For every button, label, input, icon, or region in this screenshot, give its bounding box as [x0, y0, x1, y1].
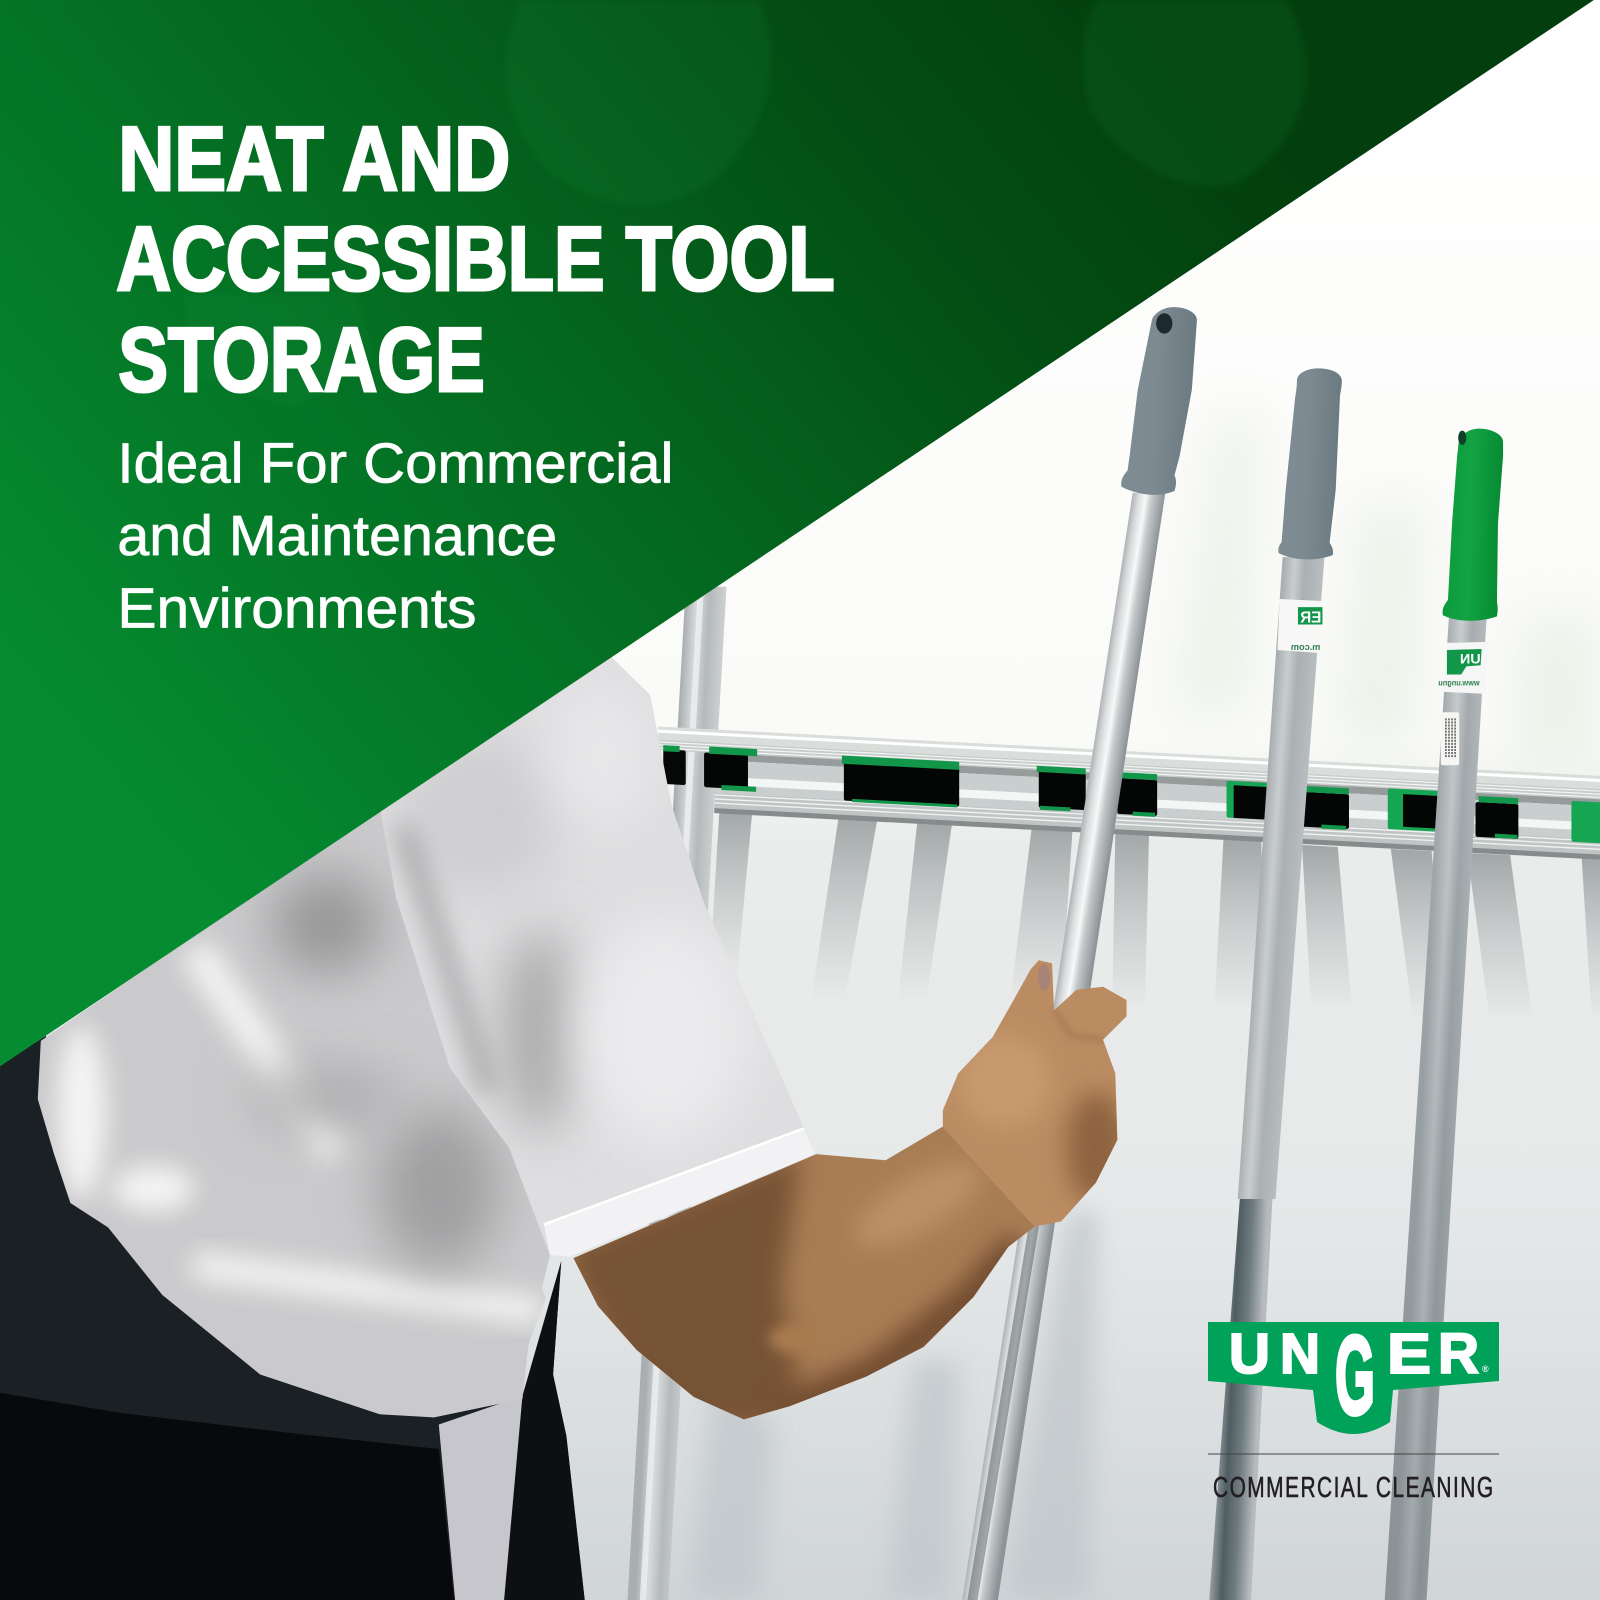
pole 3 with green grip	[1385, 429, 1503, 1600]
pole 3 grip	[1443, 429, 1503, 621]
logo badge	[1208, 1322, 1499, 1434]
sleeve hem	[544, 1128, 815, 1257]
pole 2 lower section	[1209, 1199, 1272, 1600]
clip 2	[704, 746, 757, 792]
clip 8	[1388, 788, 1451, 832]
pole 2 label	[1278, 599, 1322, 653]
subtitle: Ideal For Commercial	[117, 432, 673, 495]
clip 7	[1298, 786, 1349, 830]
subtitle: Environments	[117, 577, 477, 640]
pole 2 grip	[1278, 368, 1342, 559]
decorative lighter blobs in panel	[184, 0, 1306, 408]
person: forearm	[561, 1127, 1035, 1429]
logo wordmark: G	[1335, 1313, 1375, 1438]
Unger Commercial Cleaning logo	[1208, 1313, 1499, 1504]
title: ACCESSIBLE TOOL	[116, 209, 835, 310]
pole 2 label: ER	[1300, 609, 1321, 626]
title	[116, 109, 835, 411]
title: NEAT AND	[118, 109, 510, 210]
pole 3 shaft	[1385, 616, 1487, 1600]
pole 2 label: m.com	[1291, 642, 1320, 652]
logo wordmark	[1229, 1313, 1489, 1438]
person: white t-shirt	[38, 643, 827, 1417]
soft wall shadows behind handles	[1173, 408, 1600, 765]
clip 10	[1571, 801, 1600, 844]
trouser waist shadow	[0, 1393, 454, 1600]
clip 6	[1227, 781, 1280, 820]
pole 1 grey grip	[1121, 307, 1197, 495]
logo wordmark: E	[1387, 1322, 1431, 1386]
person: trousers and apron	[0, 1036, 585, 1600]
clip 9	[1476, 796, 1518, 839]
green diagonal panel	[0, 0, 1594, 1066]
clip 4	[1037, 766, 1086, 812]
horizontal tool rail	[658, 727, 1600, 862]
pole 3 label	[1438, 642, 1489, 694]
pole 3 label: www.ungnu	[1438, 678, 1481, 688]
shirt sleeve	[367, 643, 827, 1265]
pole 2 with grey grip	[1209, 368, 1342, 1600]
person: hand gripping pole	[943, 960, 1128, 1227]
clip 3	[842, 756, 959, 808]
logo wordmark: U	[1229, 1322, 1270, 1386]
rail tool clips	[663, 744, 1600, 844]
pole 3 label: UN	[1460, 651, 1481, 667]
long pole shadows on lower wall	[689, 1208, 1099, 1600]
logo divider	[1208, 1454, 1499, 1455]
logo wordmark: ®	[1482, 1364, 1489, 1374]
clip 5	[1117, 772, 1157, 817]
logo tagline: COMMERCIAL CLEANING	[1213, 1472, 1493, 1504]
apron panel	[439, 1396, 522, 1600]
clip 1	[663, 745, 686, 785]
pole 1 shaft	[962, 493, 1165, 1600]
shirt body folds	[57, 872, 541, 1388]
logo wordmark: N	[1280, 1322, 1320, 1386]
subtitle: and Maintenance	[117, 504, 557, 567]
subtitle	[117, 432, 673, 640]
title: STORAGE	[118, 310, 485, 411]
pole 3 grip hole	[1458, 431, 1466, 445]
vertical wall rail	[628, 587, 727, 1600]
shadows cast by rail clips	[709, 811, 1600, 1020]
pole 2 upper section	[1238, 557, 1324, 1199]
pole 1 held by hand	[962, 307, 1197, 1600]
logo wordmark: R	[1438, 1322, 1479, 1386]
pole 3 barcode sticker	[1441, 712, 1459, 765]
pole 1 grip hole	[1156, 313, 1172, 334]
